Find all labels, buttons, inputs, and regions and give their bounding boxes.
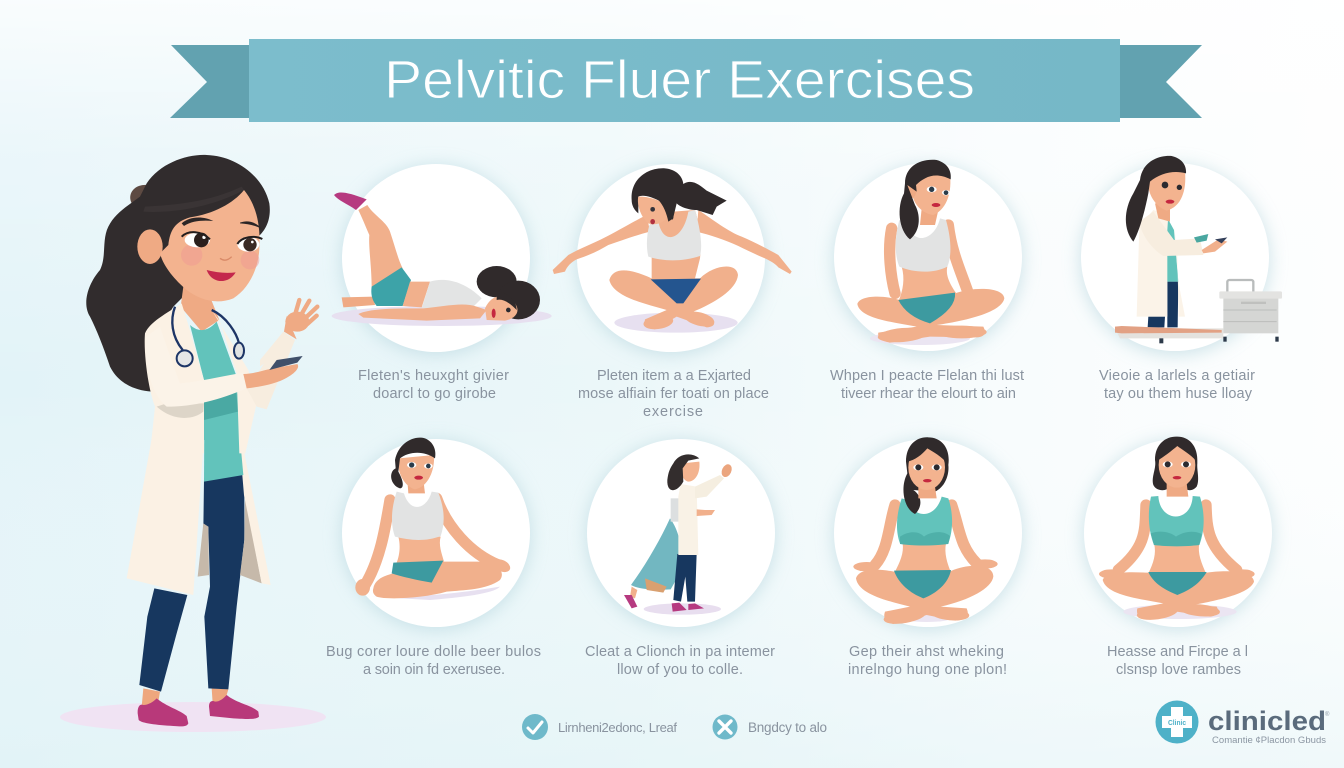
icon: check mark: [522, 714, 548, 740]
text: exercise 5: Bug corer loure dolle beer bulos: [326, 644, 541, 660]
text: exercise 2: exercise: [643, 404, 703, 420]
text: exercise 1: Fleten's heuxght givier: [358, 368, 509, 384]
exercise 1: lying leg raise: [332, 192, 552, 326]
icon: crossed tools: [712, 714, 738, 740]
title: Pelvitic Fluer Exercises: [384, 50, 975, 110]
text: exercise 6: llow of you to colle.: [617, 662, 743, 678]
exercise 7: seated teal outfit: [853, 437, 998, 627]
text: exercise 7: Gep their ahst wheking: [849, 644, 1004, 660]
exercise 5: seated leaning: [355, 438, 512, 600]
text: exercise 8: clsnsp love rambes: [1116, 662, 1241, 678]
logo: [1156, 700, 1330, 746]
legend item: check: [522, 714, 677, 740]
text: exercise 3: Whpen I peacte Flelan thi lust: [830, 368, 1024, 384]
exercise 8: seated teal outfit facing front: [1099, 437, 1255, 622]
exercise 3: seated side glance: [857, 160, 1004, 345]
exercise 4: doctor with equipment: [1115, 156, 1282, 343]
text: exercise 6: Cleat a Clionch in pa intemer: [585, 644, 775, 660]
text: exercise 2: mose alfiain fer toati on place: [578, 386, 769, 402]
text: exercise 7: inrelngo hung one plon!: [848, 662, 1007, 678]
icon: medical cross: Clinic: [1168, 720, 1186, 727]
exercise circles: [342, 163, 1272, 629]
title banner: [170, 39, 1202, 122]
logo: Comantie ¢Placdon Gbuds: [1212, 735, 1326, 746]
exercise 6: walking doctor: [624, 454, 734, 615]
text: exercise 8: Heasse and Fircpe a l: [1107, 644, 1248, 660]
doctor character: [60, 155, 326, 732]
legend item: check: Lirnheni2edonc, Lreaf: [558, 720, 677, 735]
exercise 2: cross-legged arms out: [553, 168, 792, 333]
text: exercise 4: Vieoie a larlels a getiair: [1099, 368, 1255, 384]
icon: medical cross: [1156, 700, 1198, 744]
text: exercise 1: doarcl to go girobe: [373, 386, 496, 402]
text: exercise 2: Pleten item a a Exjarted: [597, 368, 751, 384]
text: exercise 3: tiveer rhear the elourt to ain: [841, 386, 1016, 402]
legend item: tools: Bngdcy to alo: [748, 720, 827, 735]
text: exercise 5: a soin oin fd exerusee.: [363, 662, 505, 678]
legend item: tools: [712, 714, 827, 740]
logo: ®: [1325, 711, 1330, 718]
logo: clinicled: [1208, 706, 1326, 736]
text: exercise 4: tay ou them huse lloay: [1104, 386, 1253, 402]
